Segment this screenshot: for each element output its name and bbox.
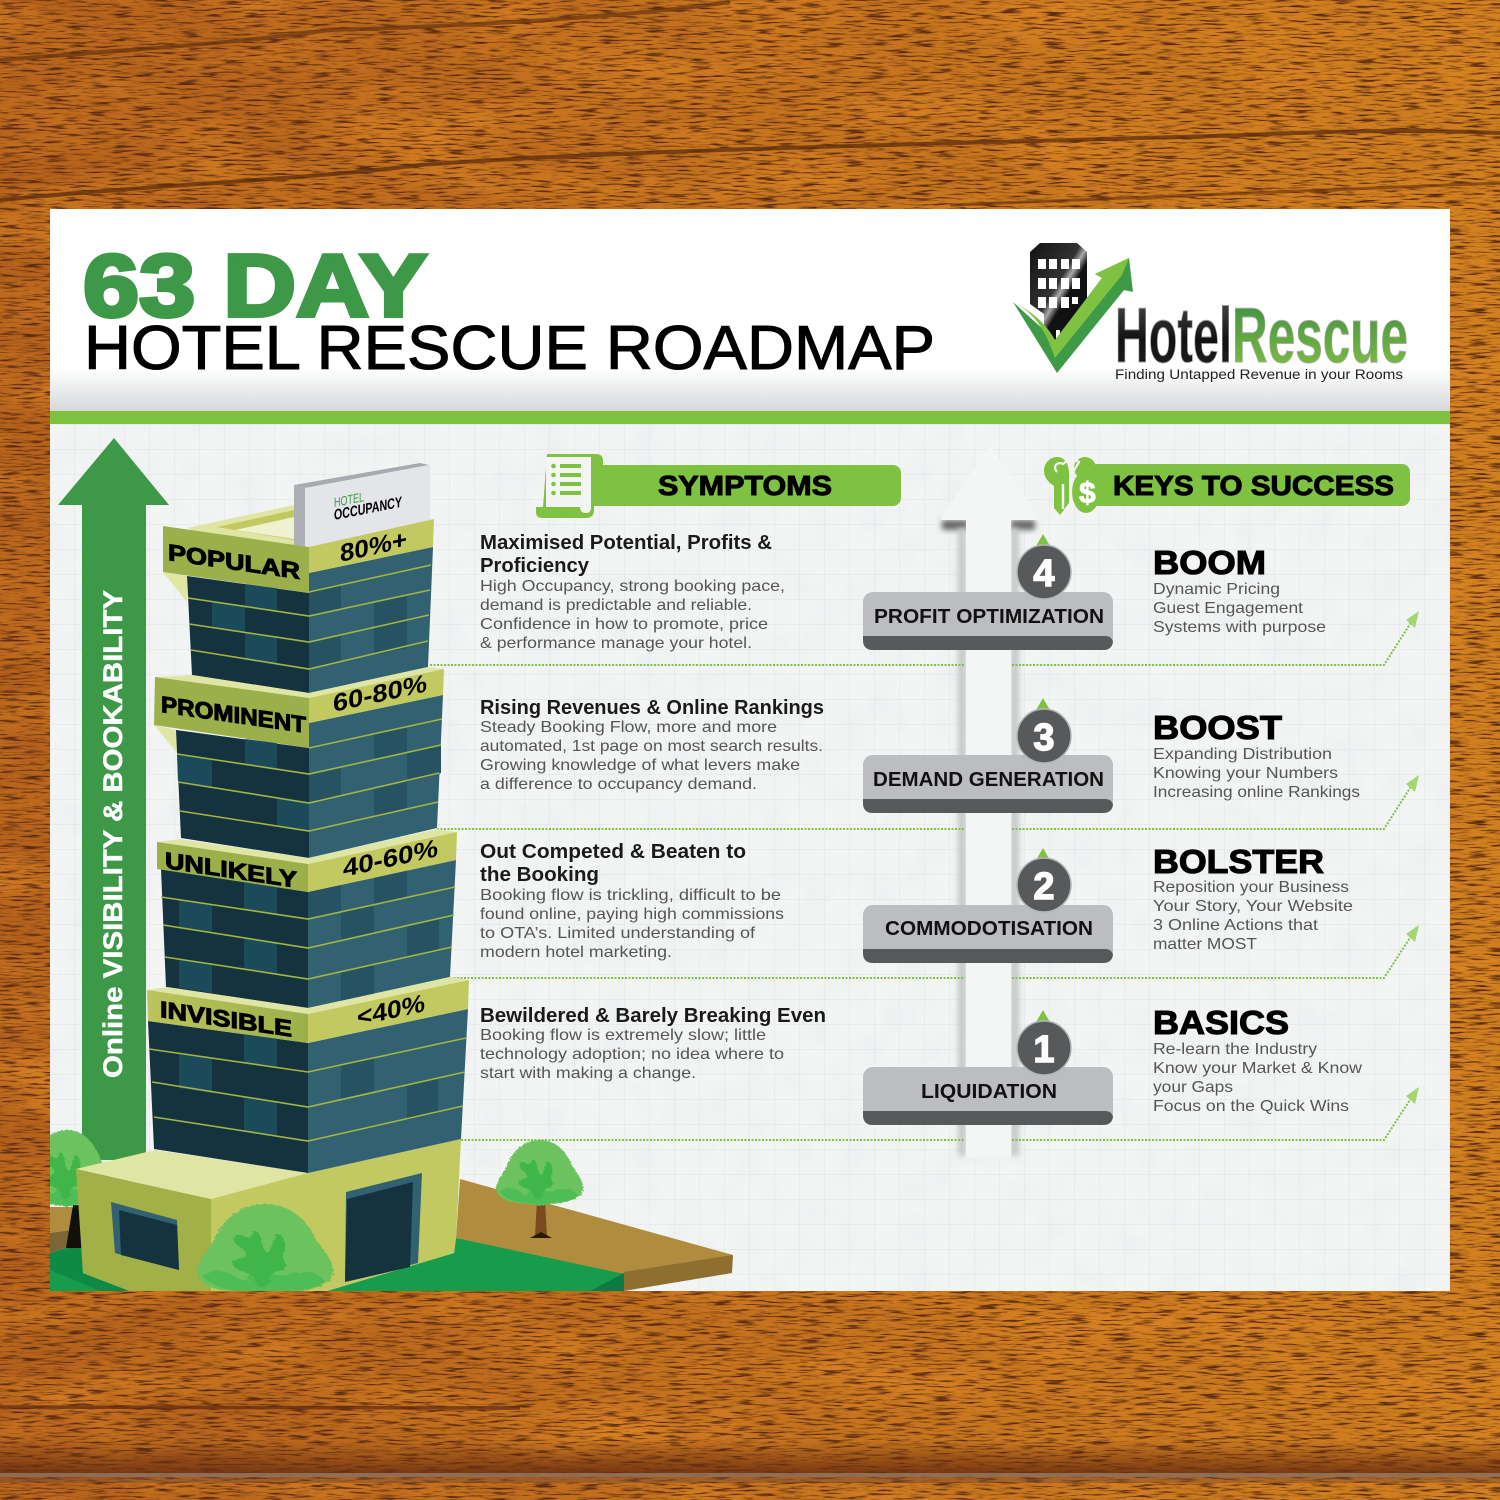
symptoms text: rising revenues: Growing knowledge of what levers make [480,757,800,774]
logo: Hotel Rescue [1013,243,1408,382]
step 1: liquidation: 1 [1033,1029,1055,1071]
header: symptoms [536,454,901,518]
symptoms text: maximised potential: Confidence in how to promote, price [480,616,768,633]
step 3: demand generation: 3 [1033,717,1055,759]
logo: Hotel Rescue: Hotel [1115,291,1232,379]
symptoms text: maximised potential: Maximised Potential, Profits & [480,532,772,554]
keys text: basics [1153,1004,1362,1115]
keys text: bolster [1153,843,1353,953]
header: keys to success: KEYS TO SUCCESS [1113,470,1394,501]
keys text: boost [1153,709,1360,801]
dotted connector lines [430,611,1419,1140]
keys text: bolster: Your Story, Your Website [1153,898,1353,915]
icon: keys [1044,457,1100,515]
tower floor: unlikely 40-60%: 40-60% [343,834,438,883]
header: symptoms: SYMPTOMS [658,470,832,501]
title: HOTEL RESCUE ROADMAP [84,314,935,383]
symptoms text: out competed: found online, paying high commissions [480,906,784,923]
rooftop [187,505,294,545]
step 1: liquidation: LIQUIDATION [921,1081,1057,1103]
step 2: commodotisation: 2 [1033,866,1055,908]
keys text: boost: Expanding Distribution [1153,746,1332,763]
symptoms text: maximised potential: demand is predictable and reliable. [480,597,752,614]
tree: front bush [197,1204,333,1296]
keys text: boom: Guest Engagement [1153,600,1304,617]
symptoms text: rising revenues: a difference to occupancy demand. [480,776,757,793]
tower floor: popular 80%+: POPULAR [168,539,300,584]
tower floor: prominent 60-80%: PROMINENT [161,691,306,738]
panel: main card [50,209,1450,1291]
step 1: liquidation [863,1010,1113,1125]
symptoms text: rising revenues [480,697,824,793]
symptoms text: out competed: Booking flow is trickling, difficult to be [480,887,781,904]
step 4: profit optimization: 4 [1033,553,1055,595]
symptoms text: maximised potential [480,532,785,652]
step 2: commodotisation: COMMODOTISATION [885,918,1093,940]
symptoms text: maximised potential: High Occupancy, strong booking pace, [480,578,785,595]
step 4: profit optimization [863,534,1113,650]
keys text: bolster: matter MOST [1153,936,1257,953]
keys text: basics: Re-learn the Industry [1153,1041,1317,1058]
tower floor: prominent 60-80%: 60-80% [333,670,427,718]
keys text: bolster: 3 Online Actions that [1153,917,1319,934]
tower floor: popular 80%+ [163,463,434,693]
keys text: boost: BOOST [1153,709,1282,746]
keys text: basics: your Gaps [1153,1079,1233,1096]
symptoms text: out competed: the Booking [480,864,599,886]
symptoms text: bewildered: technology adoption; no idea where to [480,1046,784,1063]
tower floor: invisible under 40%: <40% [357,989,425,1032]
hotel occupancy sign [294,463,430,549]
step 2: commodotisation [863,848,1113,963]
keys text: basics: BASICS [1153,1004,1289,1041]
tower floor: invisible under 40% [147,977,469,1173]
symptoms text: maximised potential: & performance manage your hotel. [480,635,752,652]
tower floor: prominent 60-80% [154,667,444,858]
symptoms text: bewildered: Booking flow is extremely slow; little [480,1027,766,1044]
tower floor: unlikely 40-60%: UNLIKELY [165,847,298,893]
step 3: demand generation [863,698,1113,813]
hotel occupancy sign: HOTEL [334,489,364,510]
icon: scroll list [536,454,603,518]
step 4: profit optimization: PROFIT OPTIMIZATION [874,606,1104,628]
logo: Hotel Rescue: Finding Untapped Revenue in your Rooms [1115,366,1403,382]
symptoms text: maximised potential: Proficiency [480,555,590,577]
symptoms text: out competed: modern hotel marketing. [480,944,672,961]
header: keys to success [1044,457,1410,515]
keys text: boom: Systems with purpose [1153,619,1326,636]
tree: left [50,1130,110,1248]
symptoms text: out competed [480,841,784,961]
ground and building base [22,1130,733,1291]
keys text: boost: Knowing your Numbers [1153,765,1338,782]
symptoms text: rising revenues: Rising Revenues & Online Rankings [480,697,824,719]
keys text: basics: Know your Market & Know [1153,1060,1362,1077]
symptoms text: out competed: Out Competed & Beaten to [480,841,746,863]
arrow: online visibility and bookability: Online VISIBILITY & BOOKABILITY [98,590,128,1078]
icon: keys: $ [1079,477,1096,510]
symptoms text: bewildered [480,1005,826,1082]
symptoms text: rising revenues: automated, 1st page on most search results. [480,738,823,755]
tree: right [496,1140,583,1238]
central white arrow [940,445,1040,1157]
keys text: bolster: Reposition your Business [1153,879,1349,896]
keys text: boom [1153,544,1326,636]
tower floor: invisible under 40%: INVISIBLE [160,996,292,1042]
title: 63 DAY [83,236,427,335]
keys text: boom: BOOM [1153,544,1266,581]
symptoms text: rising revenues: Steady Booking Flow, more and more [480,719,777,736]
hotel occupancy sign: OCCUPANCY [334,494,402,524]
step 3: demand generation: DEMAND GENERATION [873,769,1104,791]
keys text: boom: Dynamic Pricing [1153,581,1280,598]
symptoms text: bewildered: Bewildered & Barely Breaking Even [480,1005,826,1027]
symptoms text: bewildered: start with making a change. [480,1065,696,1082]
symptoms text: out competed: to OTA’s. Limited understanding of [480,925,756,942]
tower floor: unlikely 40-60% [157,829,457,1008]
arrow: online visibility and bookability [58,438,169,1160]
keys text: boost: Increasing online Rankings [1153,784,1360,801]
keys text: basics: Focus on the Quick Wins [1153,1098,1349,1115]
tower floor: popular 80%+: 80%+ [340,526,407,568]
title [83,236,935,383]
keys text: bolster: BOLSTER [1153,843,1324,880]
